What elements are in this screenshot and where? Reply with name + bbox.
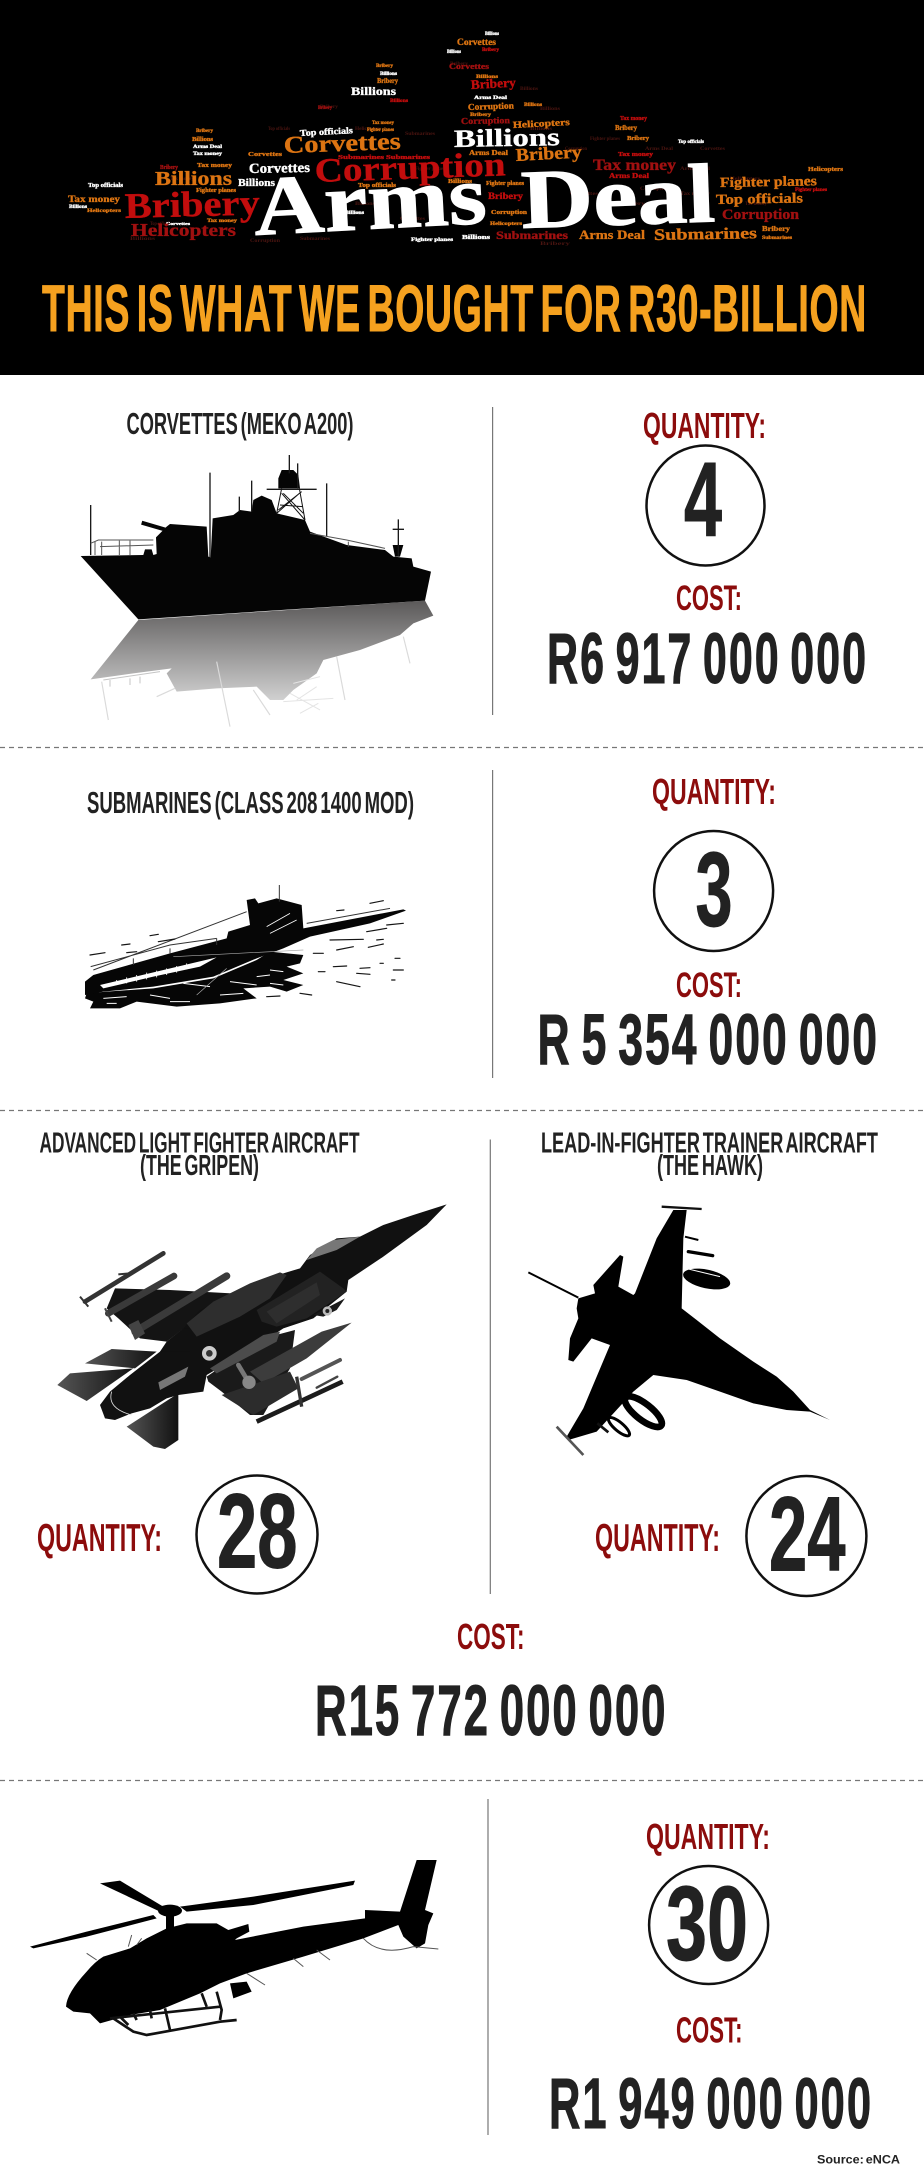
word cloud: arms deal ship shape: Bribery — [376, 64, 394, 69]
word cloud: arms deal ship shape: Corvettes — [457, 37, 497, 47]
divider — [487, 1799, 489, 2135]
word cloud: arms deal ship shape: Tax money — [593, 157, 676, 174]
word cloud: arms deal ship shape: Bribery — [318, 106, 332, 111]
word cloud: arms deal ship shape: Billions — [524, 103, 542, 108]
word cloud: arms deal ship shape: Corvettes — [249, 161, 311, 177]
word cloud: arms deal ship shape: Billions — [448, 179, 473, 185]
icon: hawk jet — [528, 1207, 830, 1455]
quantity circle: 4: 4 — [684, 441, 722, 559]
word cloud: arms deal ship shape: Tax money — [372, 121, 394, 126]
word cloud: arms deal ship shape: Tax money — [68, 195, 120, 205]
word cloud: arms deal ship shape: Billions — [380, 72, 397, 77]
word cloud: arms deal ship shape: Submarines — [300, 237, 330, 242]
word cloud: arms deal ship shape: Bribery — [488, 191, 524, 201]
word cloud: arms deal ship shape: Billions — [540, 107, 560, 112]
word cloud: arms deal ship shape: Tax money — [197, 162, 233, 169]
heading: gripen: ADVANCED LIGHT FIGHTER AIRCRAFT — [40, 1128, 360, 1160]
word cloud: arms deal ship shape: Top officials — [150, 222, 172, 227]
word cloud: arms deal ship shape: Bribery — [124, 182, 260, 226]
word cloud: arms deal ship shape: Corruption — [250, 239, 280, 244]
word cloud: arms deal ship shape: Billions — [520, 87, 538, 92]
word cloud: arms deal ship shape: Corvettes — [248, 151, 283, 158]
word cloud: arms deal ship shape: Arms Deal — [193, 145, 223, 150]
word cloud: arms deal ship shape: Bribery — [320, 105, 339, 110]
word cloud: arms deal ship shape: Billions — [462, 235, 491, 241]
panel: submarines — [85, 770, 879, 1080]
label: quantity: QUANTITY: — [652, 771, 776, 812]
word cloud: arms deal ship shape: Tax money — [680, 192, 711, 197]
word cloud: arms deal ship shape: Fighter planes — [590, 137, 620, 142]
word cloud: arms deal ship shape: Tax money — [745, 202, 767, 207]
word cloud: arms deal ship shape: Fighter planes — [486, 181, 525, 187]
quantity circle: 30: 30 — [666, 1865, 748, 1983]
word cloud: arms deal ship shape: Corvettes — [400, 217, 425, 222]
word cloud: arms deal ship shape: Fighter planes — [720, 174, 818, 191]
word cloud: arms deal ship shape: Helicopters — [355, 127, 381, 132]
word cloud: arms deal ship shape: Tax money — [170, 177, 195, 182]
label: cost: COST: — [676, 2010, 742, 2050]
word cloud: arms deal ship shape: Submarines — [654, 225, 757, 244]
word cloud: arms deal ship shape: Arms Deal — [579, 227, 645, 242]
word cloud: arms deal ship shape: Billions — [351, 84, 396, 98]
word cloud: arms deal ship shape: Submarines — [405, 132, 435, 137]
word cloud: arms deal ship shape: Submarines — [386, 155, 431, 161]
icon: helicopter — [30, 1860, 438, 2035]
word cloud: arms deal ship shape: Corruption — [640, 187, 670, 192]
quantity circle: 4 — [646, 441, 764, 566]
heading: hawk: (THE HAWK) — [657, 1150, 763, 1182]
word cloud: arms deal ship shape: Fighter planes — [367, 128, 394, 133]
word cloud: arms deal ship shape — [68, 32, 844, 254]
label: quantity hawk: QUANTITY: — [595, 1517, 720, 1560]
word cloud: arms deal ship shape: Deal — [519, 147, 717, 247]
quantity circle: 3: 3 — [696, 831, 732, 949]
word cloud: arms deal ship shape: Bribery — [515, 142, 582, 165]
word cloud: arms deal ship shape: Arms Deal — [645, 147, 674, 152]
panel: fighter aircraft — [37, 1128, 878, 1751]
panel: corvettes — [81, 405, 868, 727]
word cloud: arms deal ship shape: Fighter planes — [411, 238, 453, 243]
word cloud: arms deal ship shape: Submarines — [338, 155, 385, 161]
heading: hawk — [541, 1128, 878, 1182]
heading: submarines: SUBMARINES (CLASS 208 1400 MOD) — [87, 786, 414, 820]
word cloud: arms deal ship shape: Billions — [447, 50, 461, 55]
word cloud: arms deal ship shape: Helicopters — [730, 177, 760, 182]
word cloud: arms deal ship shape: Top officials — [358, 183, 397, 189]
word cloud: arms deal ship shape: Bribery — [627, 136, 649, 142]
word cloud: arms deal ship shape: Tax money — [620, 116, 647, 122]
word cloud: arms deal ship shape: Tax money — [207, 219, 238, 224]
label: quantity: QUANTITY: — [643, 405, 766, 446]
word cloud: arms deal ship shape: Corvettes — [166, 221, 191, 226]
word cloud: arms deal ship shape: Bribery — [482, 48, 500, 53]
cost value: R15 772 000 000 — [315, 1672, 668, 1751]
word cloud: arms deal ship shape: Corruption — [565, 147, 587, 152]
icon: gripen jet — [57, 1204, 447, 1449]
word cloud: arms deal ship shape: Helicopters — [87, 208, 121, 214]
word cloud: arms deal ship shape: Bribery — [620, 202, 646, 207]
word cloud: arms deal ship shape: Tax money — [193, 152, 223, 157]
word cloud: arms deal ship shape: Submarines — [762, 236, 792, 241]
word cloud: arms deal ship shape: Fighter planes — [196, 188, 237, 194]
word cloud: arms deal ship shape: Billions — [69, 205, 87, 210]
word cloud: arms deal ship shape: Corruption — [722, 207, 800, 223]
word cloud: arms deal ship shape: Bribery — [450, 62, 469, 67]
divider — [489, 1140, 491, 1594]
word cloud: arms deal ship shape: Bribery — [160, 165, 178, 171]
word cloud: arms deal ship shape: Helicopters — [808, 167, 844, 173]
word cloud: arms deal ship shape: Bribery — [762, 225, 791, 233]
quantity circle: 28: 28 — [217, 1472, 298, 1590]
divider — [492, 770, 494, 1078]
word cloud: arms deal ship shape: Submarines — [496, 230, 569, 242]
word cloud: arms deal ship shape: Corruption — [491, 210, 528, 216]
label: cost: COST: — [457, 1616, 524, 1657]
word cloud: arms deal ship shape: Corvettes — [283, 129, 401, 159]
word cloud: arms deal ship shape: Arms — [251, 149, 489, 254]
word cloud: arms deal ship shape: Billions — [454, 124, 560, 153]
word cloud: arms deal ship shape: Tax money — [618, 152, 653, 158]
word cloud: arms deal ship shape: Arms Deal — [680, 167, 711, 172]
word cloud: arms deal ship shape: Top officials — [268, 127, 290, 132]
word cloud: arms deal ship shape: Billions — [355, 202, 375, 207]
word cloud: arms deal ship shape: Top officials — [678, 140, 704, 145]
heading: corvettes: CORVETTES (MEKO A200) — [126, 407, 354, 441]
word cloud: arms deal ship shape: Top officials — [88, 183, 124, 189]
icon: submarine — [85, 885, 406, 1008]
word cloud: arms deal ship shape: Helicopters — [513, 118, 570, 131]
word cloud: arms deal ship shape: Bribery — [377, 77, 398, 85]
word cloud: arms deal ship shape: Billions — [238, 178, 275, 189]
word cloud: arms deal ship shape: Helicopters — [490, 222, 522, 227]
word cloud: arms deal ship shape: Bribery — [470, 75, 517, 92]
word cloud: arms deal ship shape: Billions — [485, 32, 499, 37]
word cloud: arms deal ship shape: Corvettes — [449, 62, 489, 71]
icon: corvette reflection — [91, 601, 433, 727]
header panel — [0, 0, 924, 375]
word cloud: arms deal ship shape: Billions — [345, 211, 364, 216]
word cloud: arms deal ship shape: Billions — [390, 99, 408, 104]
word cloud: arms deal ship shape: Arms Deal — [474, 96, 508, 101]
word cloud: arms deal ship shape: Bribery — [540, 242, 571, 247]
word cloud: arms deal ship shape: Bribery — [196, 129, 214, 134]
word cloud: arms deal ship shape: Bribery — [615, 124, 637, 132]
label: quantity gripen: QUANTITY: — [37, 1517, 162, 1560]
word cloud: arms deal ship shape: Bribery — [470, 113, 492, 118]
quantity circle: 3 — [654, 831, 773, 951]
word cloud: arms deal ship shape: Fighter planes — [415, 167, 445, 172]
word cloud: arms deal ship shape: Billions — [530, 127, 552, 132]
label: cost: COST: — [676, 966, 742, 1005]
word cloud: arms deal ship shape: Arms Deal — [609, 172, 649, 180]
word cloud: arms deal ship shape: Corruption — [468, 100, 514, 112]
icon: corvette silhouette — [81, 455, 431, 619]
quantity circle: 24 — [746, 1476, 866, 1596]
heading: gripen — [40, 1128, 360, 1182]
label: quantity: QUANTITY: — [646, 1816, 770, 1857]
word cloud: arms deal ship shape: Billions — [155, 168, 232, 190]
heading: gripen: (THE GRIPEN) — [140, 1150, 259, 1182]
word cloud: arms deal ship shape: Billions — [192, 137, 214, 143]
word cloud: arms deal ship shape: Corvettes — [570, 192, 598, 197]
word cloud: arms deal ship shape: Billions — [130, 237, 155, 242]
word cloud: arms deal ship shape: Fighter planes — [795, 188, 827, 193]
source credit: Source: eNCA — [817, 2152, 900, 2166]
panel: helicopters — [30, 1799, 900, 2166]
word cloud: arms deal ship shape: Corruption — [461, 115, 510, 126]
word cloud: arms deal ship shape: Arms Deal — [469, 149, 508, 157]
divider — [492, 407, 494, 715]
word cloud: arms deal ship shape: Corruption — [314, 146, 506, 190]
word cloud: arms deal ship shape: Corvettes — [700, 147, 725, 152]
label: cost: COST: — [676, 579, 742, 618]
word cloud: arms deal ship shape: Top officials — [716, 191, 804, 208]
quantity circle: 24: 24 — [769, 1476, 846, 1594]
word cloud: arms deal ship shape: Top officials — [300, 125, 354, 138]
word cloud: arms deal ship shape: Billions — [476, 75, 498, 80]
word cloud: arms deal ship shape: Helicopters — [131, 220, 236, 240]
